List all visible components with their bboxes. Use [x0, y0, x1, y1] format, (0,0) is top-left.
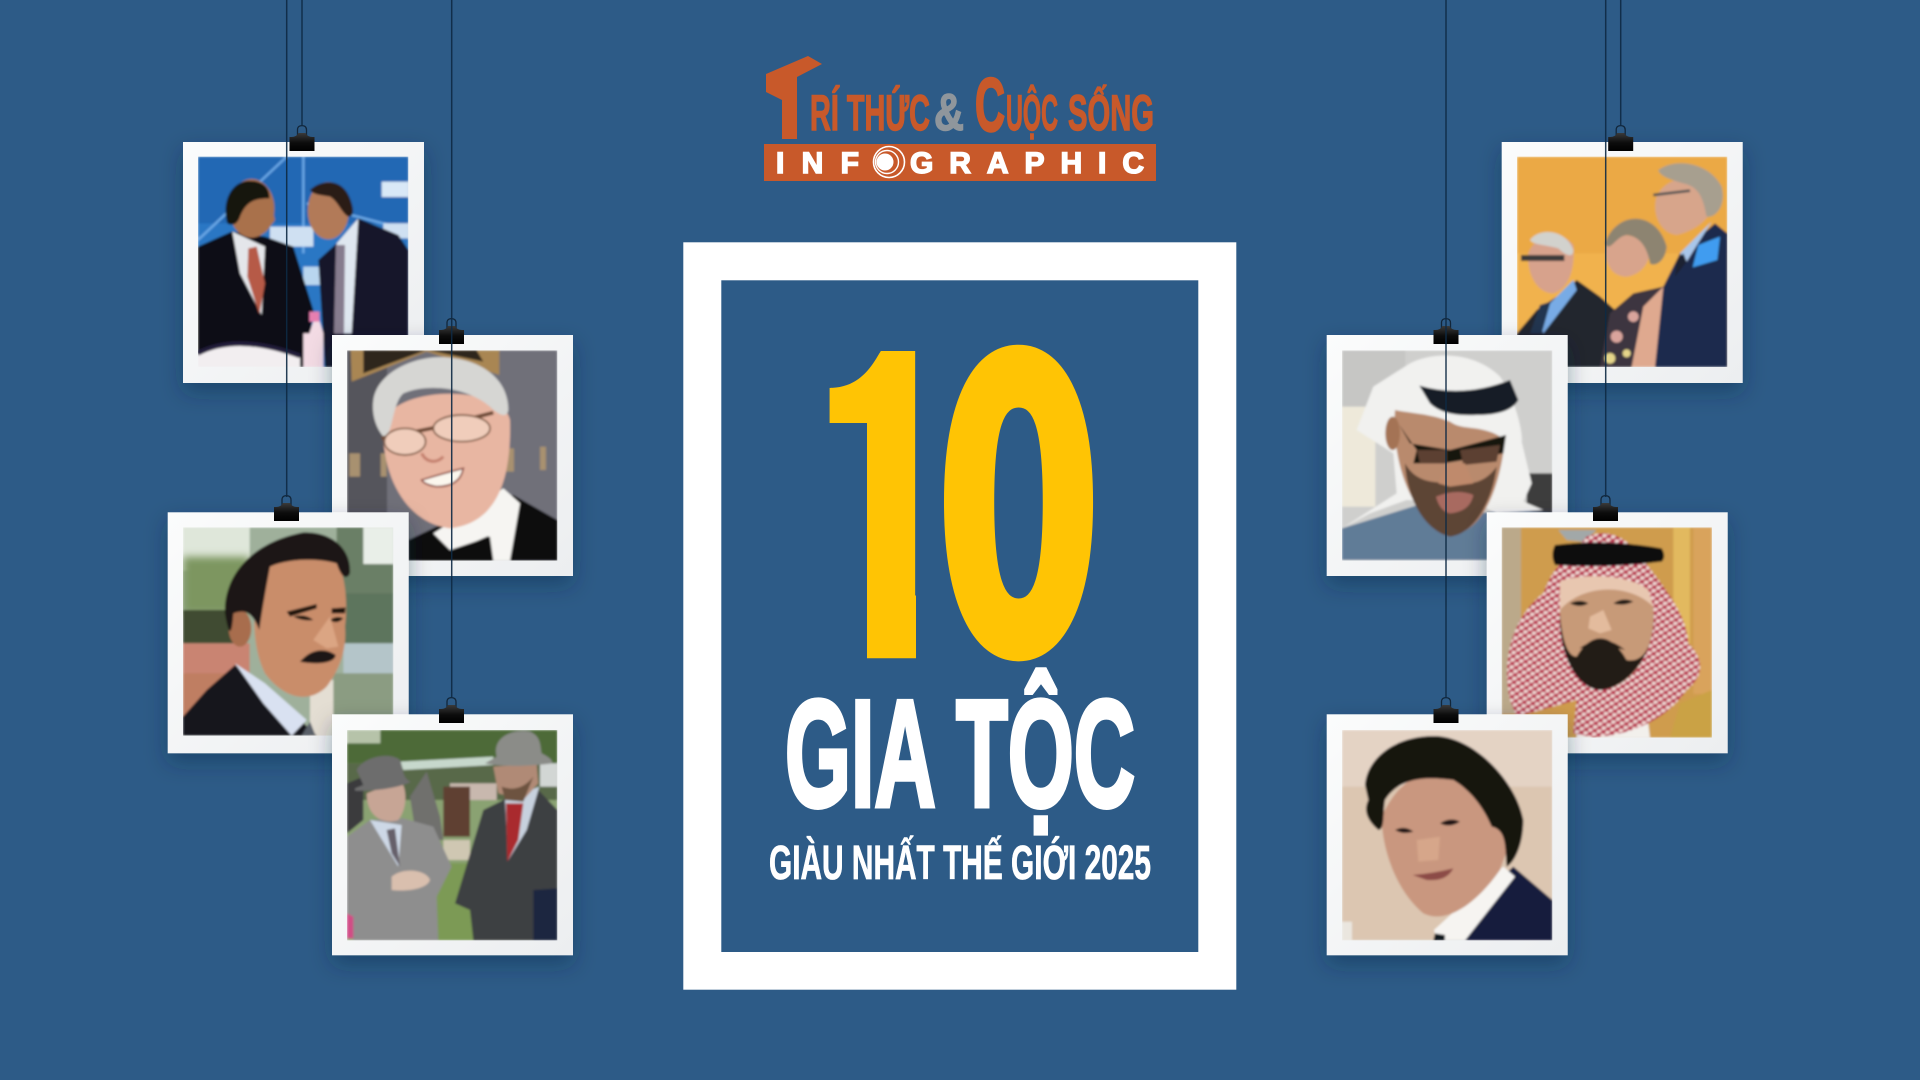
hanging strings [287, 0, 1621, 698]
panel: center title frame [683, 171, 1236, 990]
big number 10: 0 [935, 175, 1102, 771]
logo wordmark [810, 63, 1154, 147]
logo wordmark: UỘC [1006, 84, 1058, 141]
big number 10 [830, 344, 1094, 662]
photo frame 5: three family members [1502, 126, 1743, 383]
left photo column [168, 126, 573, 955]
heading: GIA TỘC: GIA TỘC [785, 669, 1135, 839]
binder clip [1608, 126, 1633, 151]
photo frame 1: two brothers [183, 126, 424, 383]
photo frame 6: man in white headdress [1327, 319, 1568, 576]
logo: Trí Thức & Cuộc Sống Infographic [764, 56, 1156, 181]
logo wordmark: SỐNG [1068, 84, 1154, 141]
right photo column [1327, 126, 1743, 955]
binder clip [439, 698, 464, 723]
inner panel [721, 280, 1198, 952]
logo banner text: GRAPHIC [910, 147, 1144, 180]
binder clip [290, 126, 314, 151]
binder clip [439, 319, 464, 344]
logo wordmark: C [975, 63, 1005, 147]
logo banner text: INF [776, 147, 859, 180]
logo banner text [776, 147, 1144, 180]
logo banner icon: globe [874, 146, 904, 178]
binder clip [274, 496, 299, 521]
logo icon: T mark [766, 56, 822, 139]
white frame [683, 242, 1236, 990]
photo frame 4: two men in bowler hats [332, 698, 573, 955]
binder clip [1593, 496, 1618, 521]
photo frame 2: smiling man with glasses [332, 319, 573, 576]
subheading: GIÀU NHẤT THẾ GIỚI 2025 [769, 835, 1151, 890]
photo frame 3: man with moustache [168, 496, 409, 753]
logo banner [764, 144, 1156, 181]
photo frame 7: man in red keffiyeh [1487, 496, 1728, 753]
infographic canvas [160, 0, 1750, 990]
logo wordmark: RÍ THỨC [810, 85, 930, 141]
binder clip [1434, 319, 1458, 344]
big number 10: 1 [805, 171, 965, 779]
logo wordmark: & [934, 84, 964, 142]
photo frame 8: man with dark hair [1327, 698, 1568, 955]
binder clip [1434, 698, 1458, 723]
